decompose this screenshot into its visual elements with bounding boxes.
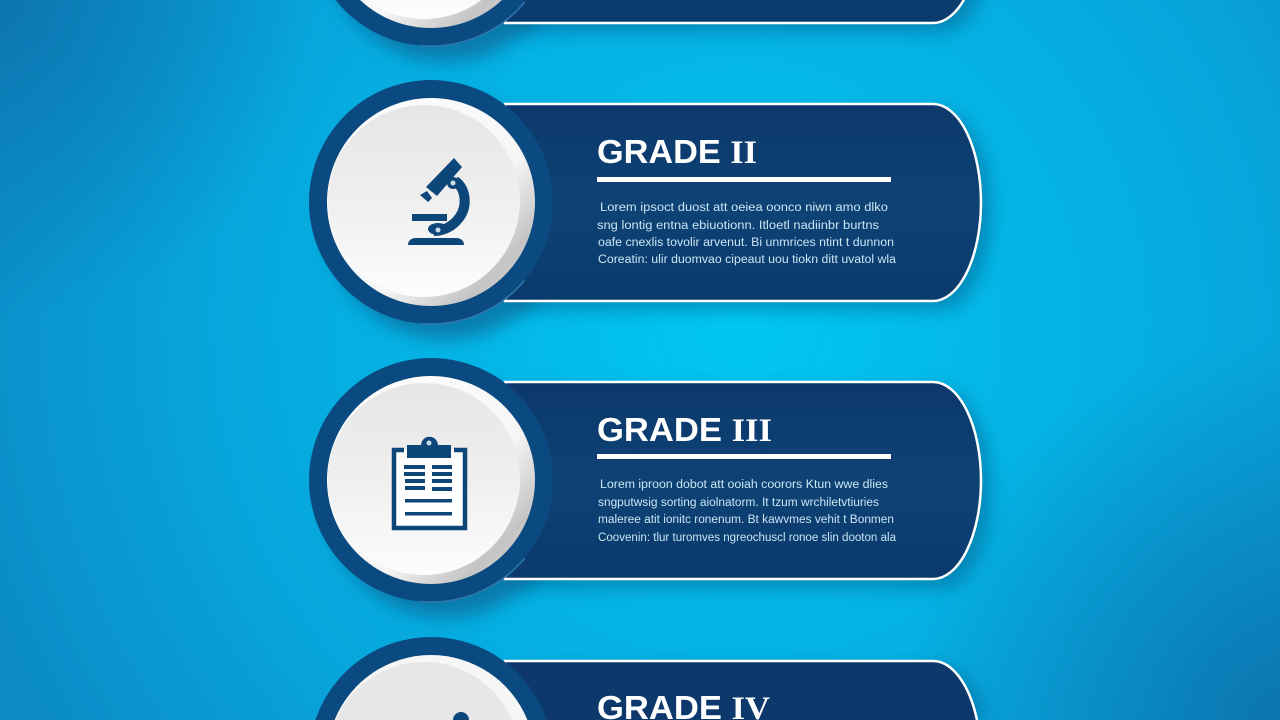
icon: microscope (408, 158, 465, 245)
white disc (327, 98, 535, 324)
text block (597, 202, 897, 266)
ring (309, 80, 553, 324)
text block: maleree atit ionitc ronenum. Bt kawvmes vehit t Bonmen (598, 514, 894, 526)
text block (598, 479, 897, 544)
card: grade III (309, 358, 991, 617)
panel: pill (505, 661, 977, 720)
text block: sngputwsig sorting aiolnatorm. It tzum wrchiletvtiuries (598, 497, 879, 509)
white disc (335, 655, 527, 720)
text block: oafe cnexlis tovolir arvenut. Bi unmrices ntint t dunnon (598, 237, 894, 249)
ring shadow (326, 99, 566, 339)
icon: cropped glyph (453, 712, 469, 720)
card: grade IV (cropped at bottom) (315, 637, 985, 720)
icon: clipboard (394, 437, 465, 528)
card: grade I (cropped at top) (309, 0, 991, 61)
card shadow (515, 112, 991, 310)
panel: pill (505, 104, 981, 301)
heading rule (597, 177, 891, 182)
text block: Coreatin: ulir duomvao cipeaut uou tiokn ditt uvatol wla (598, 254, 897, 266)
ring (309, 358, 553, 602)
text block: Coovenin: tlur turomves ngreochuscl ronoe slin dooton ala (598, 532, 897, 544)
heading: grade III: GRADE III (597, 411, 772, 449)
ring (315, 637, 547, 720)
card: grade II (309, 80, 991, 339)
heading: grade II: GRADE II (597, 133, 757, 171)
heading rule (597, 454, 891, 459)
text block: Lorem ipsoct duost att oeiea oonco niwn amo dlko (600, 202, 888, 214)
card shadow (515, 390, 991, 588)
white disc (327, 376, 535, 602)
card shadow (515, 669, 985, 720)
panel: pill (505, 382, 981, 579)
text block: sng lontig entna ebiuotionn. Itloetl nadiinbr burtns (597, 220, 879, 232)
ring shadow (326, 377, 566, 617)
text block: Lorem iproon dobot att ooiah coorors Ktun wwe dlies (600, 479, 888, 491)
